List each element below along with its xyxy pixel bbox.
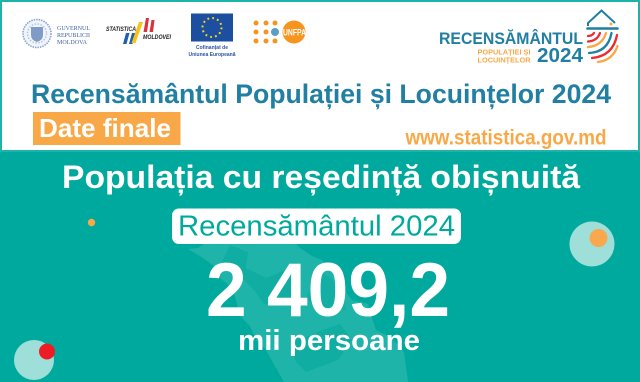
logo: Statistica Moldovei: STATISTICA (106, 27, 136, 33)
decorative dot: orange (88, 219, 95, 226)
icon: house roof (588, 10, 615, 26)
icon: house drop lines (588, 28, 618, 62)
decorative circle: right (570, 222, 614, 266)
logo: Statistica Moldovei: MOLDOVEI (143, 35, 171, 41)
logo: Guvernul Republicii Moldova: GUVERNUL (57, 25, 90, 32)
logo: Recensământul 2024: 2024 (537, 44, 584, 67)
badge: Date finale: Date finale (39, 113, 171, 143)
panel: white header (1, 1, 639, 151)
logo: Guvernul Republicii Moldova: MOLDOVA (57, 39, 87, 46)
pill: Recensământul 2024: Recensământul 2024 (178, 210, 455, 242)
logo: UNFPA: UNFPA (283, 28, 306, 38)
logo: European Union flag (188, 14, 236, 58)
logo: European Union flag: Uniunea Europeană (188, 52, 236, 58)
title: Recensământul Populației și Locuințelor 2024 (31, 79, 611, 109)
unit label: mii persoane (238, 325, 420, 357)
heading: Populația cu reședință obișnuită (62, 159, 581, 196)
logo: UNFPA (254, 20, 306, 44)
map of Moldova watermark (188, 243, 408, 382)
main figure: 2 409,2 (206, 248, 450, 333)
logo: Recensământul 2024: LOCUINȚELOR (478, 56, 531, 64)
logo: Guvernul Republicii Moldova (23, 20, 90, 48)
logo: Statistica Moldovei (106, 18, 171, 44)
decorative circle: left (14, 340, 55, 380)
logo: Guvernul Republicii Moldova: REPUBLICII (57, 32, 90, 39)
logo: European Union flag: Cofinanțat de (196, 45, 228, 51)
logo: Recensământul 2024: RECENSĂMÂNTUL (439, 29, 583, 48)
logo: Recensământul 2024: POPULAȚIEI ȘI (478, 48, 530, 56)
website link: www.statistica.gov.md (405, 126, 606, 150)
logo: Recensământul 2024 (439, 10, 618, 67)
